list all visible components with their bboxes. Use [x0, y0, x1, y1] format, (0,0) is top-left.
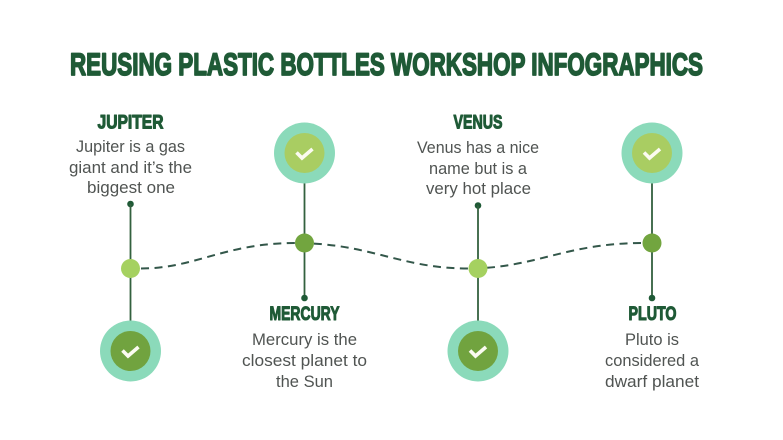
- icon: Jupiter check badge: [100, 320, 161, 382]
- step: Jupiter: [69, 112, 192, 382]
- Venus description: [417, 139, 539, 198]
- Pluto description: dwarf planet: [605, 373, 699, 391]
- Venus description: Venus has a nice: [417, 139, 539, 157]
- icon: Mercury check badge: [274, 122, 335, 184]
- Jupiter heading: JUPITER: [98, 112, 164, 134]
- Mercury timeline node: [295, 234, 314, 252]
- Mercury description: closest planet to: [242, 352, 367, 370]
- Mercury description: [242, 331, 367, 391]
- dashed wave connector: [141, 243, 643, 268]
- Venus timeline node: [468, 259, 488, 278]
- Pluto description: [605, 331, 700, 391]
- Mercury heading: MERCURY: [270, 303, 340, 325]
- Jupiter stem: [127, 201, 134, 325]
- Pluto description: Pluto is: [625, 331, 679, 349]
- Pluto timeline node: [642, 234, 662, 252]
- step: Pluto: [605, 122, 700, 391]
- Pluto heading: PLUTO: [628, 303, 676, 325]
- Jupiter description: [69, 138, 192, 197]
- Jupiter description: biggest one: [87, 179, 175, 197]
- Venus stem: [475, 202, 481, 325]
- Pluto description: considered a: [605, 352, 700, 370]
- icon: Pluto check badge: [622, 122, 682, 184]
- step: Mercury: [242, 122, 367, 391]
- Pluto stem: [649, 175, 655, 301]
- Jupiter description: Jupiter is a gas: [76, 138, 185, 156]
- Venus heading: VENUS: [454, 112, 502, 134]
- icon: Venus check badge: [448, 320, 508, 382]
- Mercury description: Mercury is the: [252, 331, 357, 349]
- Mercury stem: [301, 175, 308, 301]
- Mercury description: the Sun: [276, 373, 333, 391]
- Venus description: very hot place: [426, 180, 531, 198]
- Jupiter timeline node: [121, 259, 140, 278]
- step: Venus: [417, 112, 539, 382]
- Venus description: name but is a: [429, 160, 528, 178]
- Jupiter description: giant and it’s the: [69, 159, 192, 177]
